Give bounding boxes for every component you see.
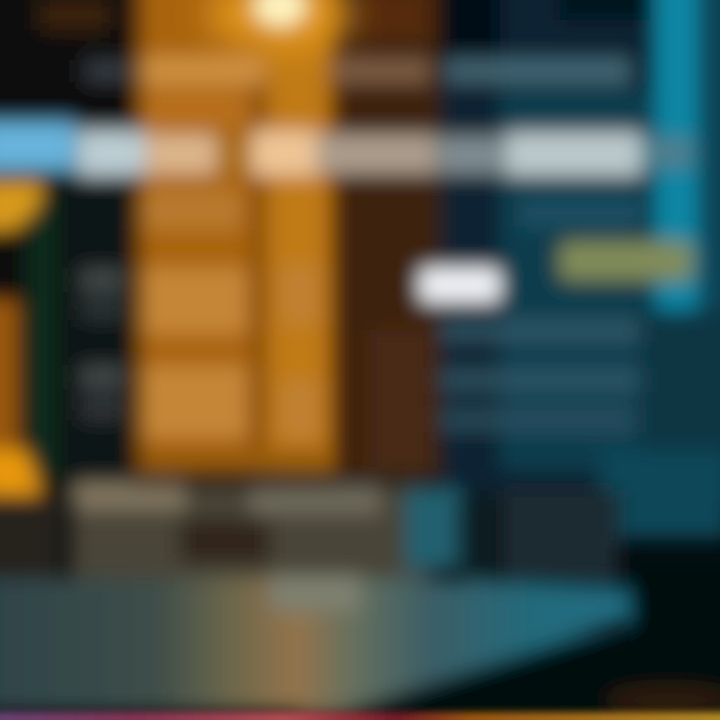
panel: orange column bbox=[138, 0, 333, 475]
panel: left lower shadow bbox=[0, 495, 65, 622]
panel: left dark column bbox=[0, 0, 135, 500]
icon: top light glow bbox=[208, 0, 352, 50]
icon: left yellow goblet bbox=[0, 182, 44, 495]
panel: warm corner bbox=[605, 686, 720, 714]
panel: floor with diagonal edge bbox=[0, 575, 720, 720]
panel: dark lower right bbox=[630, 560, 720, 720]
callout: white label bbox=[420, 268, 500, 302]
subtitle line bbox=[85, 56, 630, 86]
panel: teal column bbox=[440, 0, 720, 540]
panel: lower table bbox=[70, 482, 620, 580]
title band bbox=[0, 122, 692, 176]
panel: brown column bbox=[333, 0, 440, 480]
text rows: right column bbox=[440, 200, 640, 432]
text rows: left column bbox=[80, 268, 125, 420]
callout: olive label bbox=[560, 242, 692, 280]
colour strip along the bottom bbox=[0, 712, 720, 720]
